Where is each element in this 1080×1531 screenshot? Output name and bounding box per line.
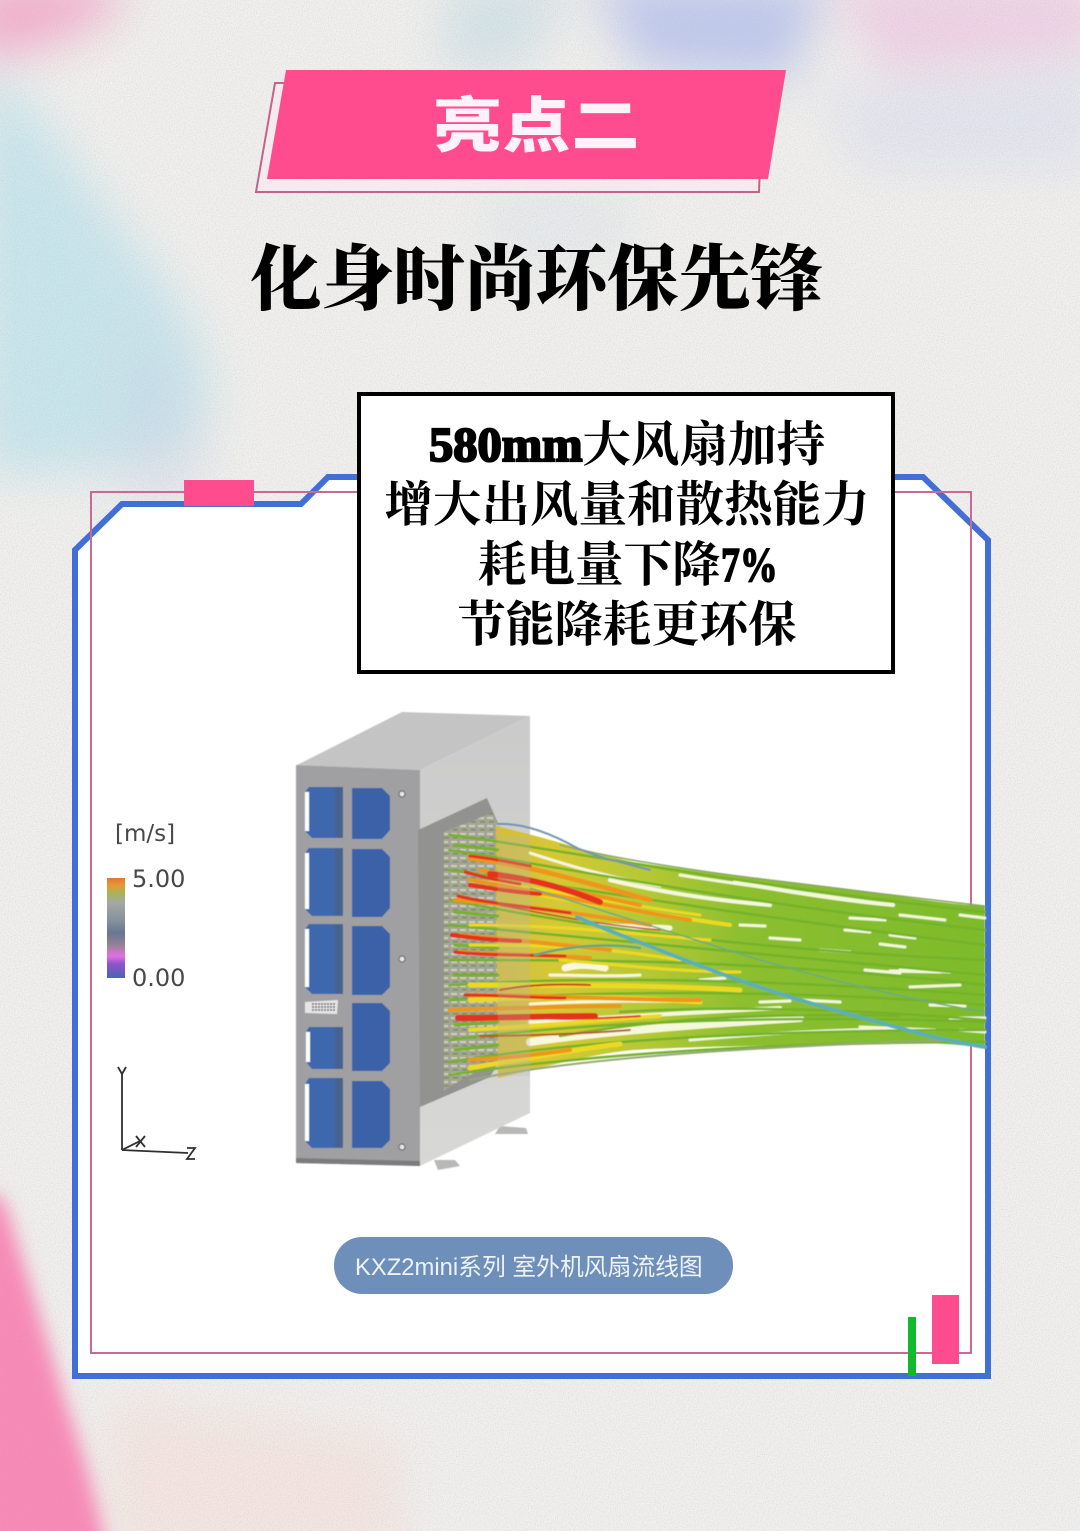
translucent side overlay: [498, 836, 530, 1076]
screws: [399, 791, 405, 1150]
unit feet: [434, 1126, 528, 1170]
callout box: 耗电量下降: [478, 538, 721, 592]
unit front face: [296, 765, 420, 1166]
green flow envelope: [496, 826, 985, 1078]
caption pill: KXZ2mini系列 室外机风扇流线图: [355, 1254, 703, 1281]
fan panel: [418, 798, 500, 1107]
title: 化身时尚环保先锋: [250, 241, 822, 320]
vent grille: [305, 1000, 338, 1014]
orange strands: [450, 858, 700, 1060]
callout box: 580mm大风扇加持: [429, 418, 825, 472]
blue top strand: [498, 824, 650, 870]
velocity legend: 0.00: [132, 964, 185, 992]
header badge: 亮点二: [256, 70, 786, 192]
callout box: [359, 394, 893, 672]
green strands: [450, 835, 985, 1075]
corner accents: [908, 1295, 959, 1376]
callout box: 增大出风量和散热能力: [384, 478, 870, 532]
unit side face: [420, 716, 530, 1166]
callout box: 节能降耗更环保: [457, 598, 797, 652]
velocity legend: [m/s]: [115, 821, 175, 847]
outdoor unit: [296, 712, 530, 1170]
velocity legend: 5.00: [132, 865, 185, 893]
velocity legend: [107, 821, 185, 992]
streamlines: [450, 824, 985, 1080]
white gaps: [530, 853, 985, 1042]
panel: frame: [75, 477, 988, 1376]
coil windows: [305, 787, 390, 1148]
yellow strands: [470, 880, 740, 1068]
grey-green edge: [470, 1040, 960, 1080]
teal strand: [577, 917, 985, 1047]
unit top face: [297, 712, 530, 770]
red strands: [452, 856, 660, 1036]
axis triad: [118, 1067, 195, 1159]
header badge: 亮点二: 亮点二: [434, 79, 640, 165]
callout box: 7%: [721, 539, 778, 592]
caption pill: [334, 1237, 733, 1294]
